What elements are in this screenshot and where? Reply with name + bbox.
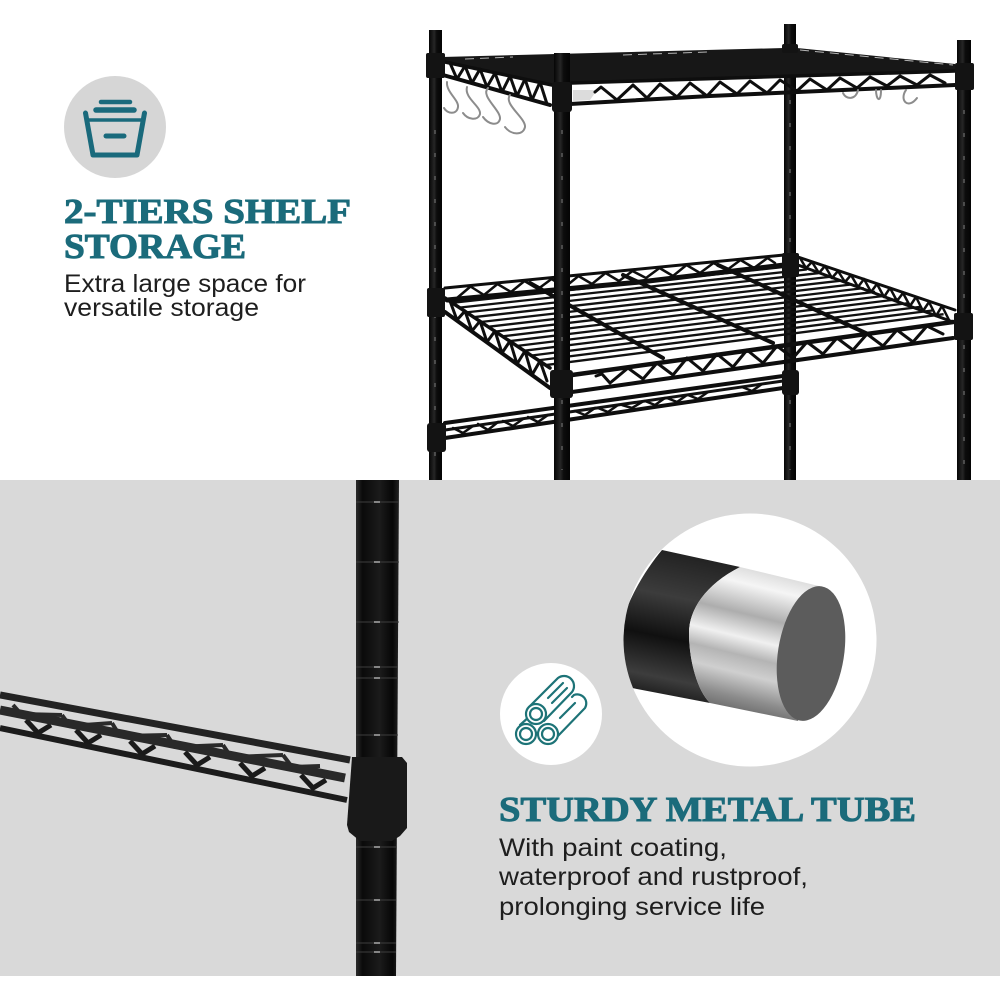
text: shelf storage description (64, 270, 306, 322)
text: sturdy metal tube description: prolonging service life (499, 893, 765, 921)
middle shelf wire deck (452, 265, 944, 365)
icon: metal tubes (500, 663, 602, 765)
text: sturdy metal tube description: With paint coating, (499, 834, 727, 862)
heading: 2-tiers shelf storage: STORAGE (64, 227, 246, 266)
background: top panel (0, 0, 1000, 480)
text: shelf storage description: Extra large space for (64, 270, 306, 298)
text: shelf storage description: versatile storage (64, 294, 259, 322)
top shelf front rail (570, 71, 955, 104)
front posts (554, 40, 971, 480)
top shelf solid surface (442, 48, 957, 85)
background: grey panel (0, 480, 1000, 976)
illustration: vertical post close-up (347, 480, 407, 976)
rear shelf posts (429, 24, 796, 480)
hooks: left group (444, 82, 525, 133)
icon: white circle with tube cross-section (620, 514, 876, 766)
collar: rail connector (347, 757, 407, 841)
lower shelf back rail (445, 376, 783, 438)
collars: post connectors (426, 44, 974, 452)
heading: 2-tiers shelf storage (64, 192, 351, 266)
middle shelf left rail (445, 298, 550, 388)
panel: sturdy metal tube (bottom section) (0, 480, 1000, 976)
top shelf left rail (443, 62, 552, 105)
illustration: shelf rail close-up (0, 695, 350, 800)
panel: shelf storage (top section) (0, 0, 1000, 480)
heading: 2-tiers shelf storage: 2-TIERS SHELF (64, 192, 351, 231)
icon: storage box (64, 76, 166, 178)
illustration: black two-tier wire shelf (426, 24, 974, 480)
middle shelf front rail (572, 322, 953, 392)
heading: sturdy metal tube: STURDY METAL TUBE (499, 790, 916, 829)
hooks: right group (843, 90, 917, 103)
middle shelf right rail (798, 257, 955, 322)
text: sturdy metal tube description (498, 834, 808, 921)
text: sturdy metal tube description: waterproof and rustproof, (498, 863, 808, 891)
middle shelf back rail (445, 255, 784, 300)
